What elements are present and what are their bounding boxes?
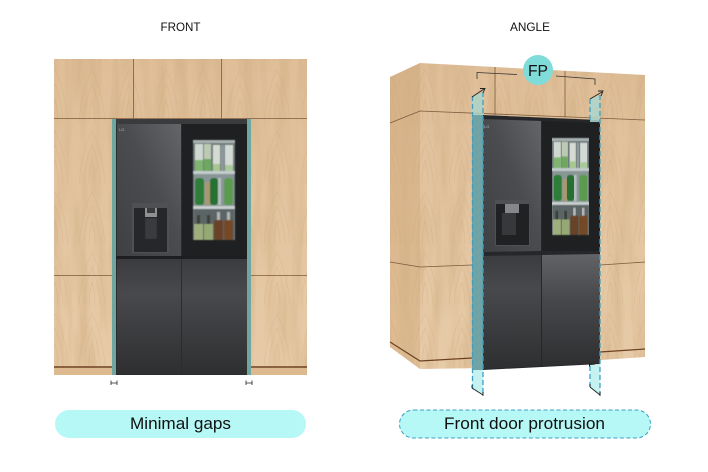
label pill: Front door protrusion [400, 410, 650, 438]
bracket: left [477, 72, 517, 79]
LG logo: LG [484, 124, 489, 129]
LG logo: LG [119, 127, 124, 132]
protrusion band: left [472, 92, 484, 395]
water dispenser [132, 203, 169, 253]
wood cabinetry, angle [390, 63, 645, 369]
lower right drawer [542, 254, 600, 366]
arrow: left top [472, 88, 485, 97]
left upper door [483, 119, 541, 252]
refrigerator, front [116, 119, 247, 375]
fridge feet [589, 364, 595, 367]
door window with bottles [193, 140, 235, 240]
heading: ANGLE: ANGLE [510, 22, 550, 34]
label pill: Minimal gaps: Minimal gaps [130, 415, 231, 433]
label pill: Minimal gaps [55, 410, 306, 438]
right upper door [542, 121, 600, 251]
gap marker: left [111, 380, 117, 385]
lower left drawer [483, 255, 541, 369]
arrow: right top [590, 91, 603, 99]
refrigerator, angle [483, 115, 600, 370]
divider bar [116, 256, 247, 259]
door window with bottles [552, 138, 589, 235]
label pill: Front door protrusion: Front door protrusion [444, 415, 605, 433]
lower right drawer [182, 259, 247, 374]
bracket: right [556, 76, 595, 85]
angle view illustration [390, 55, 645, 396]
wood cabinetry, front [54, 59, 307, 375]
badge: FP: FP [528, 63, 548, 80]
protrusion band: right [590, 95, 600, 395]
right upper door [182, 124, 247, 256]
front view illustration [54, 59, 307, 385]
badge: FP [523, 55, 553, 85]
teal gap frame, front [112, 119, 251, 375]
lower left drawer [117, 259, 181, 374]
water dispenser [495, 200, 530, 246]
left upper door [117, 124, 181, 256]
depth marks: bottom [472, 384, 600, 396]
heading: FRONT: FRONT [160, 22, 200, 34]
gap marker: right [246, 380, 252, 385]
